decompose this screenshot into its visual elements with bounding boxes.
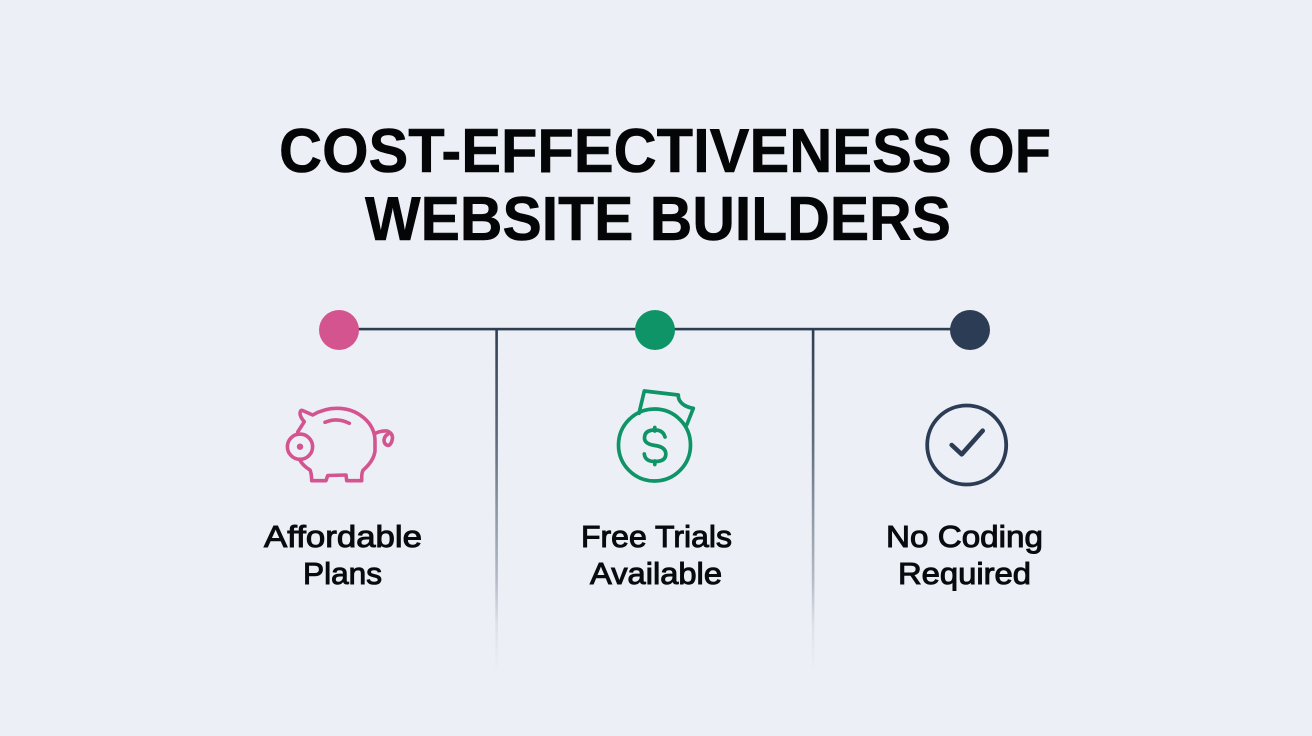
label: Affordable Plans <box>264 520 422 591</box>
label: No Coding Required: No Coding <box>886 520 1043 554</box>
icon: check circle <box>927 406 1006 484</box>
vertical divider right <box>812 329 814 672</box>
label: Free Trials Available: Free Trials <box>581 520 732 554</box>
node: green <box>635 310 675 350</box>
label: Free Trials Available: Available <box>590 557 722 591</box>
title: COST-EFFECTIVENESS OF <box>279 117 1051 186</box>
label: Affordable Plans: Affordable <box>264 520 422 554</box>
timeline <box>319 310 990 672</box>
title <box>279 117 1051 254</box>
label: Free Trials Available <box>581 520 732 591</box>
label: Affordable Plans: Plans <box>303 557 382 591</box>
node: pink <box>319 310 359 350</box>
horizontal connector line <box>355 328 955 330</box>
node: navy <box>950 310 990 350</box>
icon: piggy bank <box>287 408 392 481</box>
icon: dollar coin with bill <box>618 391 693 481</box>
title: WEBSITE BUILDERS <box>365 185 951 254</box>
label: No Coding Required <box>886 520 1043 591</box>
label: No Coding Required: Required <box>898 557 1031 591</box>
pig eye <box>299 445 301 448</box>
vertical divider left <box>495 329 498 672</box>
